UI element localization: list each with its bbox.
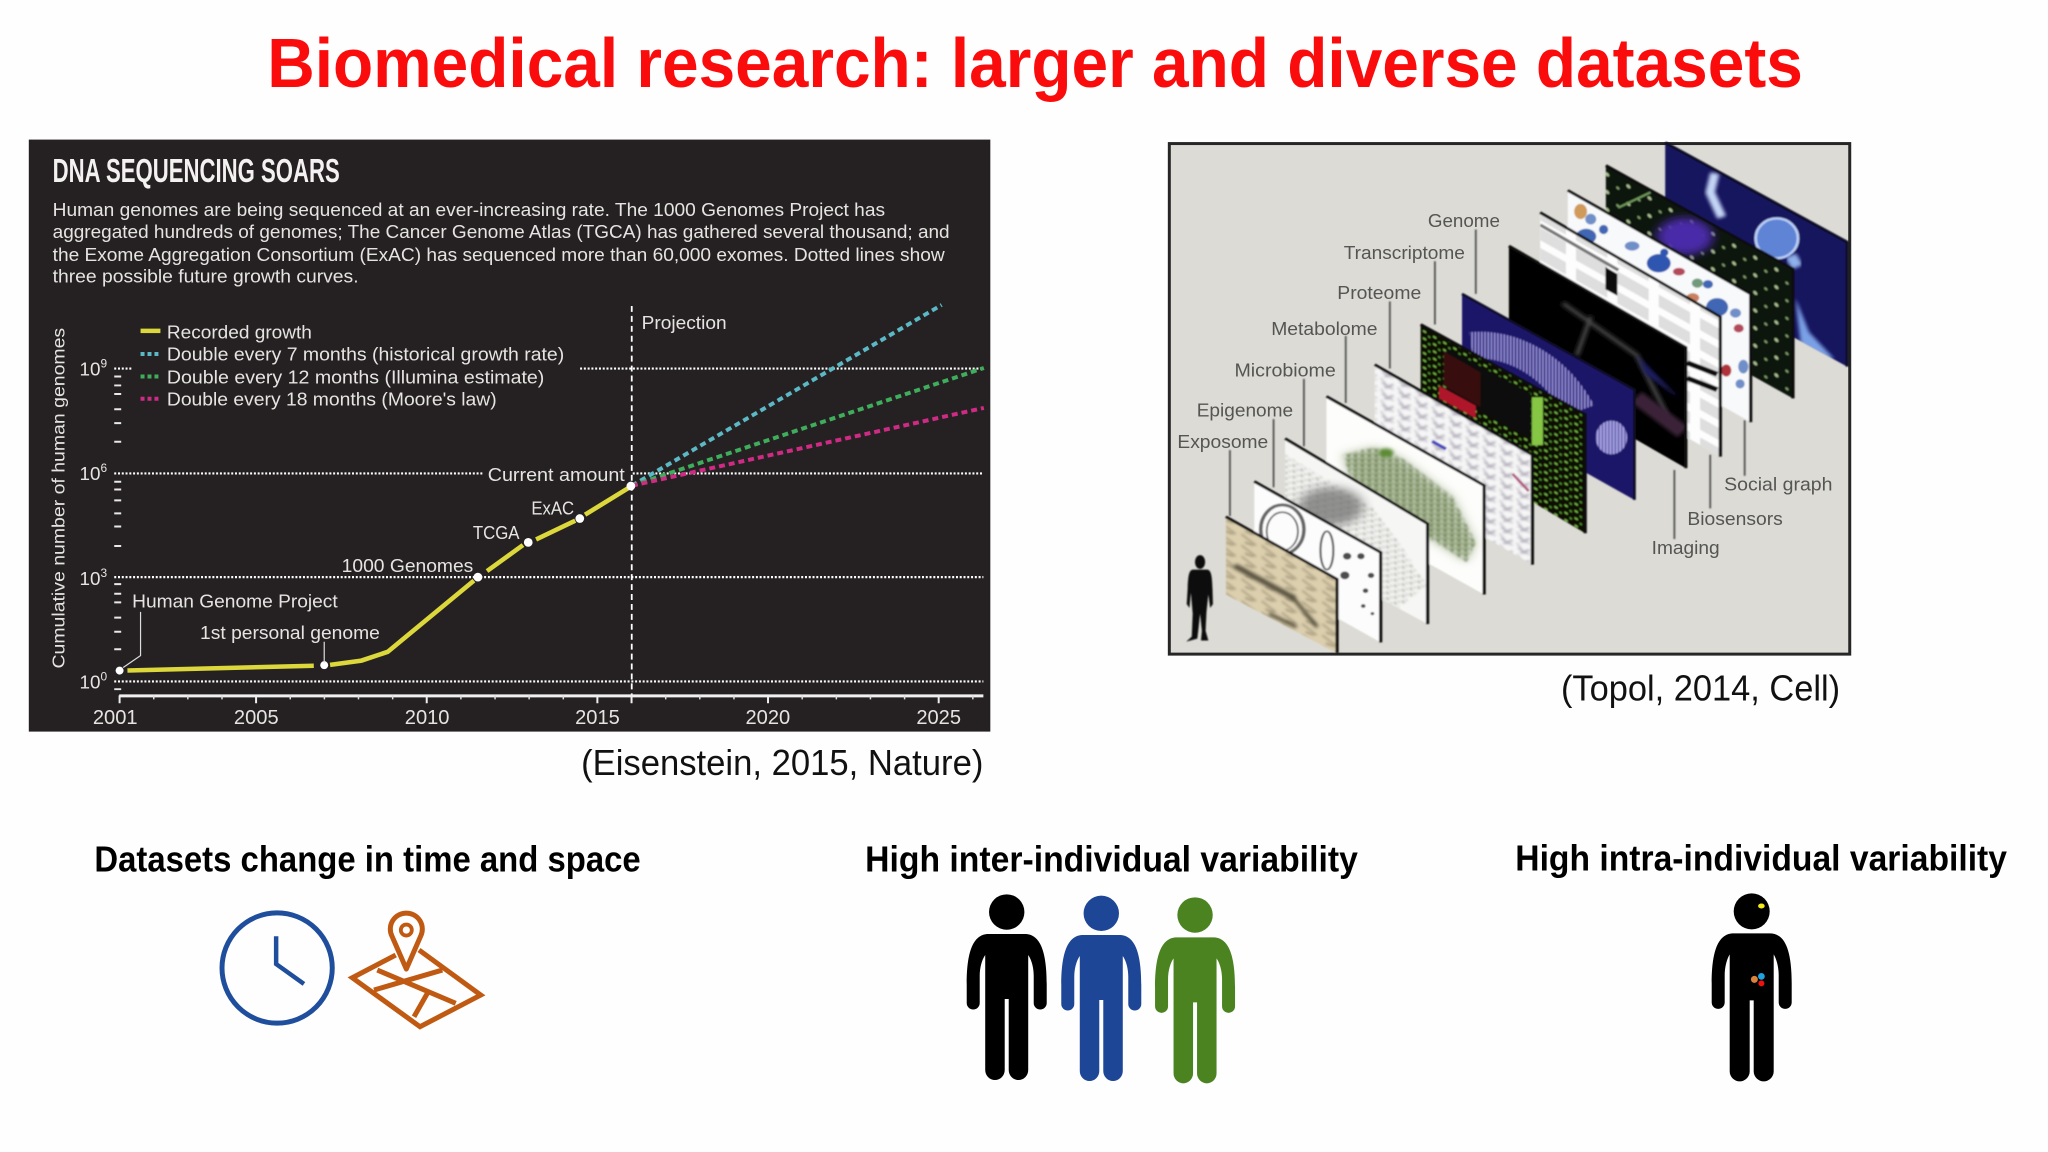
description text: Human genomes are being sequenced at an ever-increasing rate. The 1000 Genomes Project has bbox=[53, 199, 885, 220]
layer: proteome bbox=[1375, 365, 1533, 566]
chart annotations: ExAC bbox=[531, 498, 574, 519]
chart annotations: 1st personal genome bbox=[200, 622, 380, 643]
chart annotations: Current amount bbox=[488, 464, 626, 485]
heading: inter-individual: High inter-individual variability bbox=[865, 840, 1358, 880]
y axis tick labels: 10 bbox=[79, 568, 100, 589]
legend bbox=[141, 322, 564, 409]
y axis tick labels: 10 bbox=[79, 671, 100, 692]
icon: clock bbox=[222, 913, 332, 1023]
layer labels: Transcriptome bbox=[1344, 242, 1465, 263]
layer labels: Epigenome bbox=[1197, 400, 1293, 421]
x axis: 2005 bbox=[234, 707, 279, 729]
layer labels: Imaging bbox=[1652, 537, 1720, 558]
panel: DNA sequencing chart bbox=[29, 140, 990, 732]
y axis label: Cumulative number of human genomes bbox=[49, 328, 69, 669]
layer: blue body scan bbox=[1665, 143, 1847, 367]
chart annotations: Projection bbox=[642, 312, 727, 333]
layer: social graph dark bbox=[1606, 166, 1794, 399]
description text: three possible future growth curves. bbox=[53, 266, 359, 287]
heading: time and space: Datasets change in time and space bbox=[94, 840, 641, 880]
icon: green person bbox=[1155, 897, 1235, 1083]
citation: Eisenstein: (Eisenstein, 2015, Nature) bbox=[581, 743, 983, 783]
projection line: 7 months bbox=[632, 305, 942, 486]
y axis tick labels: 0 bbox=[100, 669, 107, 683]
description text bbox=[53, 199, 950, 287]
recorded growth line bbox=[127, 487, 630, 671]
layer: genome bbox=[1462, 294, 1634, 500]
x axis: 2015 bbox=[575, 707, 620, 729]
icon: person with microbiome dots bbox=[1712, 893, 1792, 1081]
description text: aggregated hundreds of genomes; The Cancer Genome Atlas (TGCA) has gathered several thousand; and bbox=[53, 221, 950, 242]
y axis tick labels: 6 bbox=[100, 461, 107, 475]
chart annotations: Human Genome Project bbox=[132, 591, 338, 612]
icon: blue person bbox=[1061, 896, 1141, 1081]
layer: biosensor documents bbox=[1540, 213, 1722, 458]
layer: microbiome bbox=[1285, 439, 1428, 624]
icon: black person bbox=[967, 894, 1047, 1080]
layer: metabolome bbox=[1326, 397, 1484, 595]
y axis tick labels: 10 bbox=[79, 463, 100, 484]
panel heading: DNA SEQUENCING SOARS bbox=[53, 152, 340, 190]
description text: the Exome Aggregation Consortium (ExAC) has sequenced more than 60,000 exomes. Dotted lines show bbox=[53, 244, 945, 265]
layer labels: Exposome bbox=[1177, 431, 1268, 452]
y axis tick labels: 10 bbox=[79, 359, 100, 380]
layer labels: Biosensors bbox=[1687, 508, 1783, 529]
projection line: 12 months bbox=[632, 368, 984, 486]
layer: epigenome bbox=[1254, 482, 1381, 642]
human silhouette bbox=[1186, 555, 1213, 642]
legend: Recorded growth bbox=[167, 322, 312, 343]
chart annotations: 1000 Genomes bbox=[342, 555, 473, 576]
layer: imaging bbox=[1509, 246, 1686, 468]
data point markers bbox=[116, 482, 635, 675]
x axis: 2025 bbox=[916, 707, 961, 729]
leader lines bbox=[1230, 230, 1745, 539]
heading: intra-individual: High intra-individual variability bbox=[1515, 839, 2007, 879]
layer labels: Proteome bbox=[1337, 282, 1421, 303]
y axis tick labels: 3 bbox=[100, 566, 107, 580]
x axis bbox=[93, 695, 983, 729]
projection line: 18 months bbox=[632, 408, 984, 486]
y axis tick labels bbox=[79, 357, 107, 692]
citation: Topol: (Topol, 2014, Cell) bbox=[1561, 668, 1840, 708]
x axis: 2020 bbox=[745, 707, 790, 729]
x axis: 2001 bbox=[93, 707, 138, 729]
legend: Double every 18 months (Moore's law) bbox=[167, 388, 497, 409]
icon: map with pin bbox=[352, 913, 481, 1027]
layer labels: Genome bbox=[1428, 210, 1500, 231]
layer labels: Metabolome bbox=[1271, 318, 1378, 339]
legend: Double every 7 months (historical growth rate) bbox=[167, 344, 564, 365]
layer: transcriptome bbox=[1421, 325, 1586, 535]
layer labels: Microbiome bbox=[1234, 360, 1336, 381]
layer labels bbox=[1177, 210, 1832, 558]
x axis: 2010 bbox=[405, 707, 449, 729]
legend: Double every 12 months (Illumina estimate) bbox=[167, 366, 544, 387]
y axis tick labels: 9 bbox=[100, 357, 107, 371]
title: Biomedical research: larger and diverse datasets bbox=[267, 24, 1803, 102]
chart annotations bbox=[132, 312, 727, 643]
chart annotations: TCGA bbox=[473, 522, 520, 543]
layer labels: Social graph bbox=[1724, 474, 1832, 495]
layer: biosensors white bbox=[1568, 190, 1751, 422]
layer: exposome bbox=[1226, 517, 1338, 654]
panel: Topol omics layers bbox=[1169, 143, 1850, 654]
